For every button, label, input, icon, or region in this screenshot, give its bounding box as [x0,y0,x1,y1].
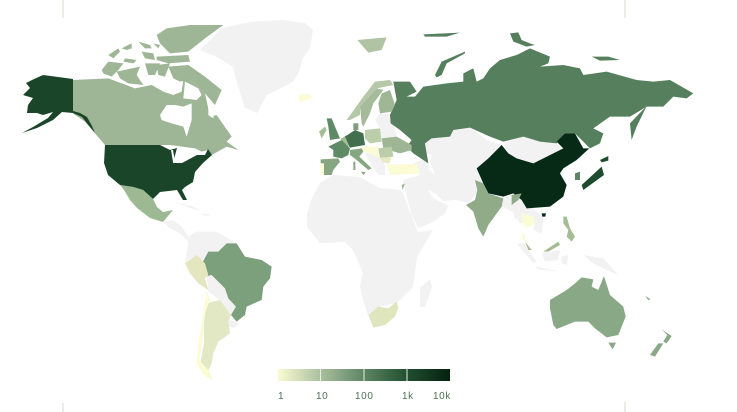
legend labels: 10k [433,391,451,402]
legend colour scale [278,369,451,402]
Denmark [353,123,358,130]
Argentina [200,300,231,370]
Hainan [542,213,546,217]
Germany [345,130,365,148]
Hudson Bay [160,82,214,137]
Romania [378,147,393,158]
Africa [307,175,433,315]
United Kingdom [327,118,340,140]
legend labels: 100 [355,391,374,402]
Mexico [120,185,173,222]
Italy [350,148,372,175]
South Korea [575,172,580,180]
Madagascar [420,279,432,307]
Spain [321,158,340,175]
Asia no data [403,128,563,228]
legend bar [278,369,450,381]
Portugal [321,163,324,175]
France [328,140,350,158]
Australia [550,276,626,349]
North America [22,25,238,222]
Chile [197,292,213,380]
Iceland [298,94,312,102]
Sweden [360,88,383,127]
Finland [378,90,395,113]
Low Countries [341,135,350,148]
Turkey [387,164,420,175]
South Africa [368,302,398,328]
legend labels [278,391,451,402]
Canada [73,25,238,155]
India [466,180,503,237]
Israel [402,183,405,190]
Southeast Asia no data [512,200,618,275]
legend labels: 1 [278,391,284,402]
Poland [365,128,382,143]
Philippines [563,217,575,242]
Caspian Sea [426,153,435,175]
legend labels: 10 [316,391,328,402]
China [477,133,589,208]
Norway [347,80,393,120]
Southampton Island [175,96,186,103]
Balkans and Belarus no data [364,113,397,175]
Bulgaria [380,157,392,163]
Malaysia [525,242,560,252]
Southern Europe [321,128,420,190]
Great Lakes [172,150,186,162]
Central and South America no data [163,202,238,328]
Austria and neighbours [362,147,382,160]
South America [185,243,272,380]
Southeast Asia and Oceania [522,213,672,357]
Bhutan and Bangladesh region [512,193,522,205]
United States and Alaska [22,75,212,200]
Malay Peninsula [522,233,526,242]
Ireland [319,127,327,138]
New Zealand [645,296,672,357]
Thailand [522,213,535,228]
Peru [185,255,208,290]
Asia countries [466,133,608,237]
Ukraine [382,137,412,153]
Russia [390,32,693,163]
legend labels: 1k [402,391,414,402]
Japan [582,156,608,190]
map: countries with no data [163,20,618,328]
Greenland [200,20,313,113]
Svalbard [357,37,387,53]
Northern Europe [319,80,395,140]
Brazil [199,243,272,322]
